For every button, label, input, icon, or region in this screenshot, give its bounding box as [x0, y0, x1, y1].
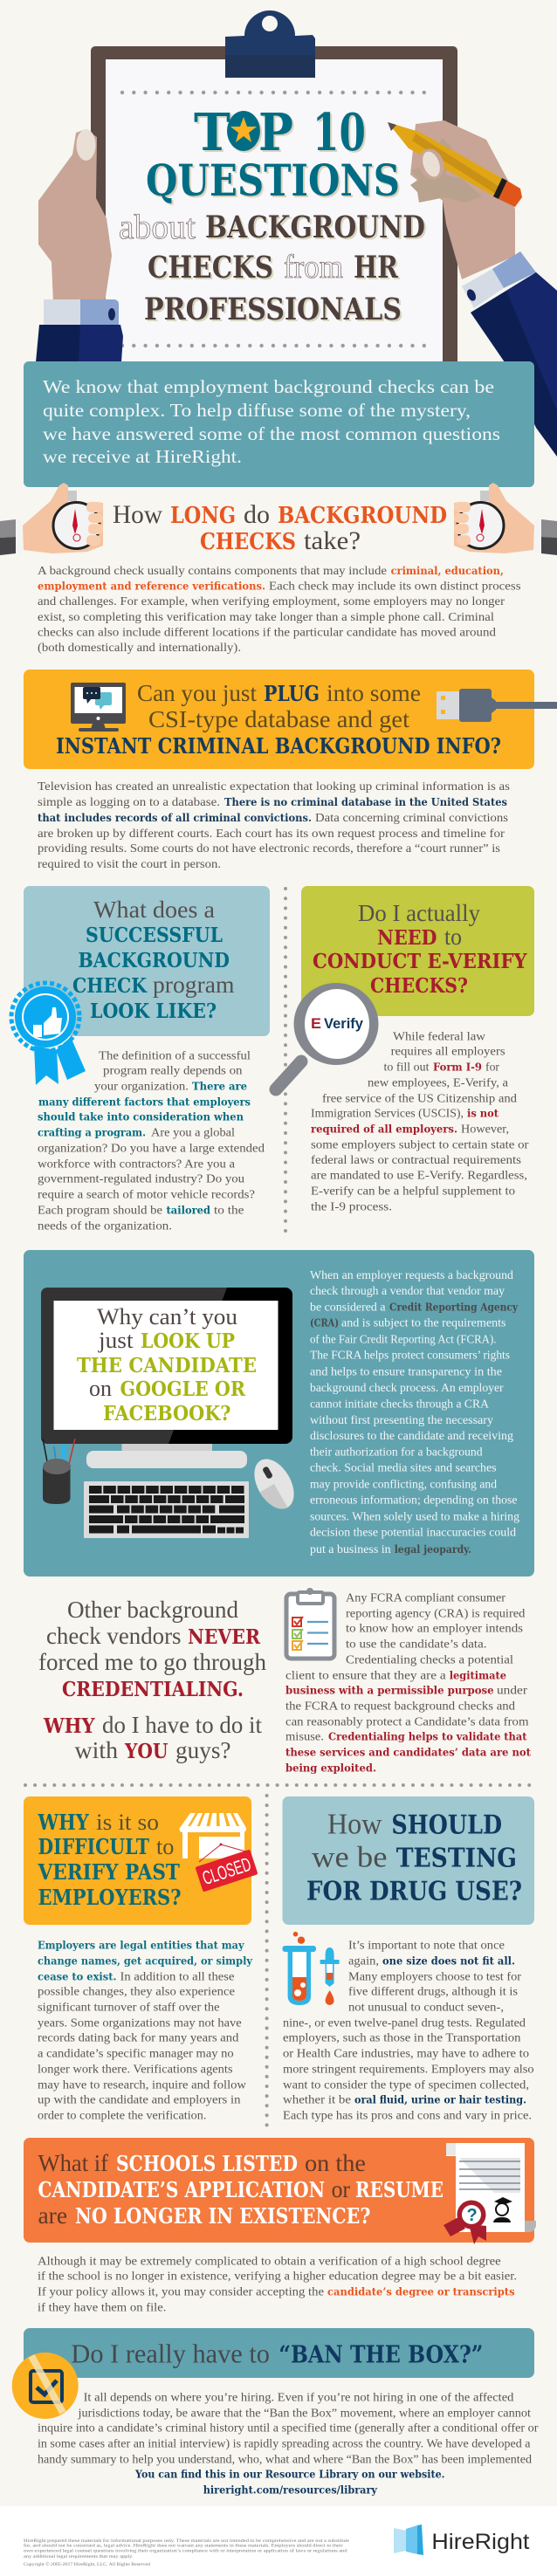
text: e-verify answer: the I-9 process. — [311, 1201, 392, 1214]
text: schools answer: if they have them on file. — [38, 2302, 166, 2315]
text: successful program answer: government-regulated industry? Do you — [38, 1172, 244, 1185]
text: drug testing answer: want to consider the type of specimen collected, — [283, 2079, 529, 2092]
heading: schools: on the — [305, 2150, 366, 2176]
heading: schools: What if — [38, 2150, 108, 2176]
text: successful program answer: organization? Do you have a large extended — [38, 1142, 265, 1155]
panel: drug testing heading: SHOULD — [391, 1810, 502, 1841]
text: e-verify answer: free service of the US Citizenship and — [322, 1093, 517, 1106]
heading: credentialing: guys? — [175, 1736, 230, 1763]
logo: hireright: HireRight — [431, 2530, 529, 2554]
text: look up answer: When an employer requests a background — [310, 1269, 513, 1282]
text: credentialing answer — [285, 1592, 531, 1775]
text: drug testing answer: Each type has its pros and cons and vary in price. — [283, 2110, 532, 2123]
heading: look up: Why can’t you — [97, 1304, 237, 1329]
heading: plug: PLUG — [264, 681, 320, 706]
text: schools answer: If your policy allows it, you may consider accepting the — [38, 2286, 324, 2299]
text: successful program answer: your organization. — [94, 1081, 189, 1094]
heading: credentialing: Other background — [67, 1596, 238, 1623]
panel: ban the box heading: Do I really have to — [71, 2339, 270, 2369]
text: schools answer: candidate’s degree or transcripts — [327, 2286, 515, 2298]
heading: credentialing: with — [75, 1736, 118, 1763]
heading: look up: GOOGLE OR — [120, 1377, 246, 1401]
text: look up answer: without first presenting the necessary — [310, 1414, 493, 1427]
text: how long answer — [38, 565, 520, 655]
intro panel — [24, 361, 534, 487]
text: credentialing answer: under — [497, 1685, 527, 1698]
text: ban the box answer — [38, 2392, 539, 2497]
icon: keyboard — [84, 1481, 249, 1538]
text: schools answer: Although it may be extremely complicated to obtain a verification of a high school degree — [38, 2255, 501, 2268]
text: successful program answer: crafting a program. — [38, 1126, 146, 1138]
text: verify past employers answer: years. Some organizations may not have — [38, 2017, 242, 2030]
text: credentialing answer: Credentialing checks a potential — [346, 1654, 513, 1667]
text: e-verify answer: federal laws or contractual requirements — [311, 1154, 521, 1167]
title: BACKGROUND — [205, 210, 425, 245]
heading: schools: SCHOOLS LISTED — [116, 2151, 298, 2176]
text: e-verify answer: some employers subject to certain state or — [311, 1139, 529, 1152]
text: ban the box answer: You can find this in our Resource Library on our website. — [134, 2469, 445, 2481]
icon: closed store — [180, 1813, 258, 1892]
text: e-verify answer: are mandated to use E-Verify. Regardless, — [311, 1170, 527, 1183]
text: e-verify answer: is not — [467, 1108, 499, 1120]
text: look up answer: legal jeopardy. — [395, 1543, 471, 1556]
icon: stopwatch right — [454, 483, 557, 555]
text: verify past employers answer: may have to research, inquire and follow — [38, 2079, 247, 2092]
heading: credentialing: NEVER — [188, 1625, 261, 1649]
text: successful program answer: tailored — [166, 1205, 211, 1217]
text: look up answer: background check process. An employer — [310, 1382, 504, 1395]
panel: successful program heading: program — [153, 971, 234, 998]
heading: schools: CANDIDATE’S APPLICATION — [38, 2177, 325, 2202]
left hand holding clipboard — [36, 129, 123, 362]
title: QUESTIONS — [146, 155, 400, 206]
text: look up answer: put a business in — [310, 1543, 391, 1556]
text: look up answer: be considered a — [310, 1302, 386, 1315]
panel: successful program heading: BACKGROUND — [79, 949, 230, 972]
text: successful program answer: should take into consideration when — [38, 1110, 244, 1123]
text: look up answer: Credit Reporting Agency — [389, 1302, 519, 1314]
icon: diploma with seal — [444, 2143, 536, 2244]
panel: successful program heading: What does a — [93, 896, 215, 923]
title: PROFESSIONALS — [144, 292, 402, 327]
icon: banned checkbox — [12, 2353, 79, 2419]
text: e-verify answer: new employees, E-Verify, a — [368, 1077, 509, 1090]
title — [119, 102, 425, 327]
heading: credentialing: YOU — [124, 1740, 168, 1763]
text: how long answer: checks can also include different locations if the particular candidate has moved around — [38, 626, 496, 639]
panel: drug testing heading — [283, 1796, 534, 1925]
text: e-verify answer: E-verify can be a helpful supplement to — [311, 1185, 515, 1199]
icon: usb plug — [437, 689, 557, 722]
clipboard board — [91, 46, 457, 378]
text: legal disclaimer: Copyright © 2005-2017 HireRight, LLC. All Rights Reserved — [24, 2561, 150, 2567]
text: drug testing answer: not unusual to conduct seven-, — [348, 2001, 504, 2014]
panel: verify past employers heading — [24, 1796, 258, 1925]
text: ban the box answer: hireright.com/resources/library — [203, 2484, 378, 2497]
text: how long answer: (both domestically and internationally). — [38, 642, 241, 655]
icon: magnifier with e-verify logo: E — [311, 1015, 321, 1032]
text: look up answer: of the Fair Credit Reporting Act (FCRA). — [310, 1333, 496, 1346]
heading: schools — [38, 2150, 444, 2229]
icon: diploma with seal: ? — [466, 2206, 478, 2225]
title: T — [194, 102, 230, 162]
text: credentialing answer: can reasonably protect a Candidate’s data from — [285, 1716, 529, 1729]
heading: credentialing: WHY — [43, 1714, 95, 1738]
text: look up answer: cannot initiate checks through a CRA — [310, 1398, 490, 1412]
heading: schools: are — [38, 2202, 67, 2229]
panel: e-verify heading: to — [444, 923, 462, 950]
text: look up answer: decision these potential inaccuracies could — [310, 1527, 516, 1540]
text: verify past employers answer: cease to exist. — [38, 1970, 117, 1982]
text: ban the box answer: It all depends on where you’re hiring. Even if you’re not hiring in one of the affected — [84, 2392, 513, 2405]
intro text: we have answered some of the most common questions — [43, 423, 500, 444]
text: ban the box answer: handy summary to help you understand, who, what and where “Ban the Box” has been implemented — [38, 2454, 532, 2467]
text: successful program answer: Are you a global — [151, 1126, 235, 1139]
text: e-verify answer: for — [485, 1061, 499, 1075]
text: verify past employers answer: change names, get acquired, or simply — [38, 1955, 253, 1968]
heading: how long — [113, 500, 447, 555]
text: look up answer: may provide conflicting, confusing and — [310, 1479, 497, 1492]
text: successful program answer: require a search of motor vehicle records? — [38, 1188, 255, 1201]
heading: plug: Can you just — [137, 680, 257, 706]
heading: plug: INSTANT CRIMINAL BACKGROUND INFO? — [56, 733, 501, 759]
heading: look up: LOOK UP — [141, 1329, 235, 1353]
text: verify past employers answer: Employers are legal entities that may — [38, 1940, 244, 1952]
heading: how long: How — [113, 500, 162, 529]
text: look up answer: The FCRA helps protect consumers’ rights — [310, 1350, 510, 1363]
text: look up answer: check through a vendor that vendor may — [310, 1285, 505, 1298]
clipboard header illustration — [91, 10, 457, 378]
text: legal disclaimer: any additional legal requirements that may apply. — [24, 2554, 134, 2559]
text: ban the box answer: in some cases after an initial interview) is rapidly spreading across the country. We have developed a — [38, 2438, 531, 2451]
text: plug answer — [38, 780, 510, 871]
icon: closed store: CLOSED — [200, 1853, 254, 1889]
text: look up answer: erroneous information; depending on those — [310, 1494, 517, 1508]
panel: drug testing heading: we be — [312, 1842, 388, 1874]
text: drug testing answer: again, — [348, 1955, 379, 1968]
text: drug testing answer: one size does not fit all. — [382, 1955, 515, 1968]
text: credentialing answer: client to ensure that they are a — [285, 1670, 447, 1683]
text: e-verify answer: However, — [461, 1123, 509, 1137]
text: plug answer: providing results. Some courts do not have electronic records, therefore a “court runner” is — [38, 842, 500, 855]
panel: verify past employers heading: is it so — [96, 1810, 159, 1835]
text: credentialing answer: being exploited. — [285, 1762, 376, 1775]
title: HR — [354, 250, 399, 285]
text: verify past employers answer: longer work there. Verifications agents — [38, 2063, 232, 2076]
text: verify past employers answer: records dating back for many years and — [38, 2032, 238, 2045]
right hand with pencil — [388, 120, 557, 457]
heading: look up: just — [98, 1328, 134, 1353]
icon: desktop monitor — [41, 1288, 292, 1468]
text: successful program answer: Each program should be — [38, 1205, 162, 1218]
text: successful program answer: to the — [214, 1205, 244, 1218]
clipboard paper — [106, 59, 443, 374]
text: drug testing answer: more stringent requirements. Employers may also — [283, 2063, 534, 2076]
text: look up answer: and is subject to the requirements — [341, 1317, 506, 1330]
text: e-verify answer: requires all employers — [391, 1046, 505, 1059]
text: successful program answer: workforce with contractors? Are you a — [38, 1157, 236, 1171]
text: credentialing answer: these services and candidates’ data are not — [285, 1747, 531, 1759]
text: plug answer: There is no criminal database in the United States — [224, 796, 507, 808]
text: credentialing answer: misuse. — [285, 1730, 324, 1743]
heading: credentialing: CREDENTIALING. — [62, 1678, 244, 1701]
panel: successful program heading: SUCCESSFUL — [86, 924, 223, 947]
text: successful program answer: There are — [192, 1081, 247, 1093]
panel: verify past employers heading: DIFFICULT — [38, 1834, 149, 1859]
text: successful program answer: many different factors that employers — [38, 1096, 251, 1109]
heading: look up — [77, 1304, 257, 1425]
panel: e-verify heading: NEED — [377, 926, 437, 950]
text: e-verify answer: required of all employers. — [311, 1123, 457, 1136]
icon: mouse — [246, 1453, 302, 1515]
text: how long answer: employment and reference verifications. — [38, 580, 265, 593]
text: how long answer: and challenges. For example, when verifying employment, some employers may no longer — [38, 595, 505, 608]
panel: e-verify heading: Do I actually — [358, 899, 480, 926]
heading: plug: into some — [327, 680, 421, 706]
heading: look up: THE CANDIDATE — [77, 1354, 257, 1377]
text: look up answer: their authorization for a background — [310, 1446, 483, 1460]
panel: ban the box heading: “BAN THE BOX?” — [278, 2341, 483, 2369]
text: look up answer: (CRA) — [310, 1317, 339, 1329]
logo: hireright — [394, 2524, 529, 2555]
icon: stopwatch left — [0, 483, 103, 555]
panel: ban the box heading — [24, 2328, 534, 2378]
text: e-verify answer: Immigration Services (USCIS), — [311, 1108, 464, 1121]
pencil — [388, 122, 522, 207]
panel: drug testing heading: FOR DRUG USE? — [306, 1877, 522, 1907]
heading: plug: CSI-type database and get — [148, 706, 410, 732]
heading: schools: RESUME — [355, 2177, 444, 2202]
heading: credentialing: forced me to go through — [38, 1648, 266, 1675]
text: e-verify answer: Form I-9 — [433, 1061, 482, 1074]
heading: how long: take? — [304, 526, 361, 555]
panel: e-verify heading: CONDUCT E-VERIFY — [313, 950, 527, 973]
panel: drug testing heading: How — [327, 1809, 382, 1841]
text: plug answer: Data concerning criminal convictions — [315, 812, 508, 825]
text: verify past employers answer: order to complete the verification. — [38, 2110, 206, 2123]
text: e-verify answer: to fill out — [384, 1061, 430, 1075]
text: successful program answer: program really depends on — [103, 1065, 243, 1078]
text: drug testing answer: five different drugs, although it is — [348, 1986, 518, 1999]
heading: credentialing — [38, 1596, 266, 1763]
text: how long answer: Each check may include its own distinct process — [269, 580, 520, 594]
text: look up answer — [310, 1269, 519, 1556]
icon: ribbon badge with thumb — [11, 983, 86, 1085]
text: plug answer: Television has created an unrealistic expectation that looking up criminal information is as — [38, 780, 510, 793]
panel: successful program heading — [24, 886, 270, 1036]
intro text: we receive at HireRight. — [43, 446, 242, 467]
text: drug testing answer: Many employers choose to test for — [348, 1970, 521, 1983]
panel: verify past employers heading: EMPLOYERS? — [38, 1885, 182, 1910]
text: credentialing answer: to know how an employer intends — [346, 1623, 523, 1636]
text: drug testing answer — [283, 1940, 534, 2123]
text: drug testing answer: nine-, or even twelve-panel drug tests. Regulated — [283, 2017, 526, 2030]
text: credentialing answer: legitimate — [450, 1670, 506, 1682]
text: e-verify answer — [311, 1030, 529, 1214]
title: 10 — [313, 102, 366, 162]
text: successful program answer — [38, 1049, 265, 1233]
text: credentialing answer: Any FCRA compliant consumer — [346, 1592, 505, 1605]
panel: successful program heading: CHECK — [72, 974, 148, 998]
intro text: We know that employment background checks can be — [43, 376, 494, 397]
panel: verify past employers heading: VERIFY PAST — [38, 1859, 180, 1885]
title: CHECKS — [148, 250, 273, 285]
panel: verify past employers heading: WHY — [38, 1810, 89, 1835]
text: drug testing answer: oral fluid, urine or hair testing. — [354, 2094, 526, 2106]
text: plug answer: are broken up by different courts. Each court has its own request process and timeline for — [38, 828, 505, 841]
text: drug testing answer: It’s important to note that once — [348, 1940, 505, 1953]
text: how long answer: exist, so completing this verification may take longer than a simple phone call. Criminal — [38, 611, 494, 624]
text: how long answer: criminal, education, — [391, 565, 504, 577]
text: look up answer: disclosures to the candidate and receiving — [310, 1430, 513, 1443]
panel: verify past employers heading: to — [156, 1834, 174, 1859]
text: look up answer: check. Social media sites and searches — [310, 1462, 496, 1475]
text: credentialing answer: Credentialing helps to validate that — [328, 1730, 527, 1742]
text: verify past employers answer: In addition to all these — [120, 1970, 234, 1983]
icon: pen cup — [43, 1439, 75, 1504]
heading: look up: FACEBOOK? — [103, 1402, 230, 1425]
text: look up answer: sources. When solely used to make a hiring — [310, 1511, 519, 1524]
text: legal disclaimer: own experienced legal counsel questions involving their organization’s compliance with or interpretation or application of laws or regulations and — [24, 2548, 347, 2554]
intro text: quite complex. To help diffuse some of the mystery, — [43, 400, 471, 421]
text: schools answer — [38, 2255, 517, 2315]
intro text — [43, 376, 500, 467]
text: legal disclaimer: HireRight prepared these materials for informational purposes only. These materials are not intended to be comprehensive and are not a substitute — [24, 2538, 350, 2544]
icon: magnifier with e-verify logo — [276, 983, 379, 1089]
text: how long answer: A background check usually contains components that may include — [38, 565, 387, 578]
text: plug answer: simple as logging on to a database. — [38, 796, 220, 809]
heading: schools: NO LONGER IN EXISTENCE? — [75, 2203, 370, 2229]
text: credentialing answer: business with a permissible purpose — [285, 1685, 494, 1697]
heading: how long: CHECKS — [200, 528, 296, 555]
icon: magnifier with e-verify logo: Verify — [324, 1015, 364, 1032]
panel: e-verify heading — [301, 886, 534, 1016]
heading: schools: or — [332, 2176, 350, 2202]
text: plug answer: required to visit the court in person. — [38, 858, 221, 871]
title: about — [119, 207, 196, 246]
footer band — [0, 2506, 557, 2576]
text: drug testing answer: whether it be — [283, 2094, 351, 2107]
text: ban the box answer: jurisdictions today, be aware that the “Ban the Box” movement, where an employer cannot — [77, 2407, 531, 2420]
text: schools answer: if the school is no longer in existence, verifying a higher education degree may be a bit easier. — [38, 2270, 517, 2284]
panel: look up on google — [24, 1250, 534, 1577]
text: drug testing answer: employers, such as those in the Transportation — [283, 2032, 520, 2045]
title: P — [258, 102, 293, 162]
text: verify past employers answer — [38, 1940, 253, 2123]
text: drug testing answer: or Health Care industries, may have to adhere to — [283, 2048, 529, 2061]
heading: credentialing: do I have to do it — [102, 1711, 262, 1738]
text: legal disclaimer — [24, 2538, 350, 2567]
icon: monitor with chat bubbles — [71, 683, 126, 732]
panel: plug into database — [24, 670, 557, 769]
heading: how long: BACKGROUND — [278, 502, 447, 529]
text: look up answer: and helps to ensure transparency in the — [310, 1366, 502, 1379]
heading: how long: LONG — [170, 502, 236, 529]
text: credentialing answer: to use the candidate’s data. — [346, 1638, 487, 1652]
text: e-verify answer: While federal law — [393, 1030, 486, 1043]
text: verify past employers answer: possible changes, they also experience — [38, 1986, 235, 1999]
text: plug answer: that includes records of all criminal convictions. — [38, 812, 312, 824]
title: from — [284, 249, 343, 285]
panel: drug testing heading: TESTING — [396, 1844, 517, 1874]
text: verify past employers answer: up with the candidate and employers in — [38, 2094, 241, 2107]
text: credentialing answer: reporting agency (CRA) is required — [346, 1608, 525, 1621]
panel: schools no longer exist — [24, 2138, 536, 2244]
clipboard clip — [225, 10, 315, 78]
text: ban the box answer: inquire into a candidate’s criminal history until a specified time (generally after a conditional offer or — [38, 2422, 539, 2435]
heading: plug — [56, 680, 501, 759]
heading: credentialing: check vendors — [46, 1622, 182, 1649]
heading: how long: do — [244, 500, 270, 529]
text: successful program answer: The definition of a successful — [99, 1049, 251, 1062]
icon: checklist clipboard — [286, 1588, 334, 1659]
heading: look up: on — [89, 1376, 112, 1401]
text: credentialing answer: the FCRA to request background checks and — [285, 1700, 515, 1714]
text: verify past employers answer: significant turnover of staff over the — [38, 2001, 220, 2014]
text: legal disclaimer: for, and should not be construed as, legal advice. HireRight does not warrant any statements in these materials. Employers should direct to their — [24, 2543, 343, 2549]
panel: e-verify heading: CHECKS? — [370, 974, 468, 998]
icon: test tube and dropper — [283, 1932, 340, 2005]
panel: successful program heading: LOOK LIKE? — [90, 999, 217, 1023]
text: successful program answer: needs of the organization. — [38, 1219, 172, 1233]
text: verify past employers answer: a candidate’s specific manager may no — [38, 2048, 234, 2061]
